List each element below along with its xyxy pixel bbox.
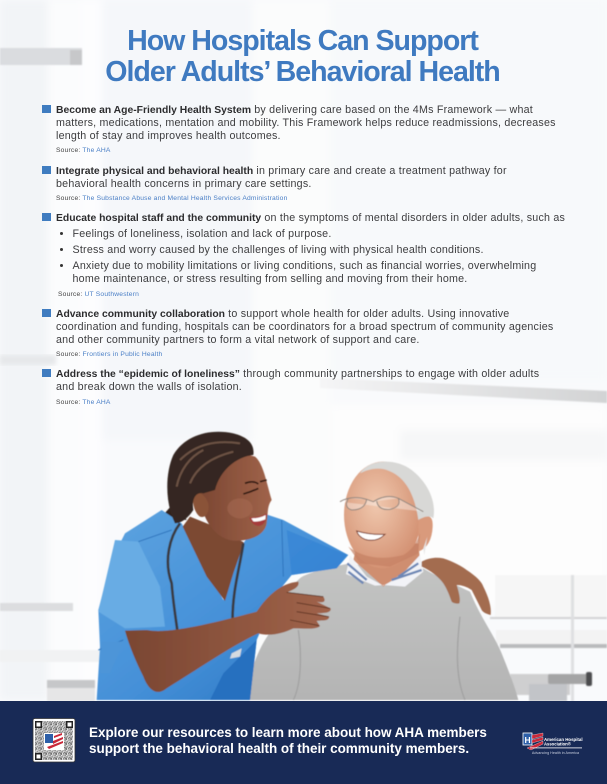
shirt collar: [346, 555, 423, 587]
nurse forearm and hand on shoulder: [125, 582, 331, 692]
item: educate hospital staff and community: Stress and worry caused by the challenges of living with physical health conditions.: [72, 244, 484, 256]
item: address the epidemic of loneliness: Address the “epidemic of loneliness” through community partnerships to engage with older adults: [56, 368, 539, 380]
item: integrate physical and behavioral health: behavioral health concerns in primary care settings.: [56, 178, 312, 190]
nurse neck: [183, 517, 244, 601]
QR code: [33, 718, 75, 762]
AHA logo: American Hospital: [544, 737, 583, 742]
item: address the epidemic of loneliness: Source: The AHA: [56, 398, 111, 406]
item: educate hospital staff and community: Anxiety due to mobility limitations or living conditions, such as financial worries, overwhelming: [72, 260, 536, 272]
item: advance community collaboration: and other community partners to form a vital network of support and care.: [56, 334, 420, 346]
older man hair: [360, 462, 434, 520]
item: educate hospital staff and community: Source: UT Southwestern: [58, 290, 139, 298]
item: age-friendly health system: Source: The AHA: [56, 146, 111, 154]
title: How Hospitals Can Support: [127, 25, 478, 57]
footer call to action: support the behavioral health of their community members.: [89, 741, 469, 756]
item: age-friendly health system: matters, medications, mentation and mobility. This Framework helps reduce readmissions, decreases: [56, 117, 556, 129]
nurse hand on far shoulder: [422, 558, 491, 615]
AHA logo: Advancing Health in America: [532, 751, 580, 755]
smile: [357, 531, 385, 540]
glasses: [340, 496, 423, 512]
photo: nurse and older patient: [97, 432, 518, 700]
nurse face: [198, 455, 272, 541]
title: Older Adults’ Behavioral Health: [105, 56, 500, 88]
nurse smile: [249, 513, 267, 526]
nurse hair back: [162, 502, 187, 520]
item: advance community collaboration: coordination and funding, hospitals can be coordinators for a broad spectrum of community agencies: [56, 321, 553, 333]
footer call to action: Explore our resources to learn more about how AHA members: [89, 725, 487, 740]
item: educate hospital staff and community: Educate hospital staff and the community on the symptoms of mental disorders in older adults, such as: [56, 212, 565, 224]
item: age-friendly health system: Become an Age-Friendly Health System by delivering care based on the 4Ms Framework — what: [56, 104, 533, 116]
stethoscope: [168, 523, 243, 647]
older man neck and face: [353, 543, 420, 587]
item: address the epidemic of loneliness: and break down the walls of isolation.: [56, 381, 242, 393]
item: advance community collaboration: [42, 308, 553, 358]
AHA logo: H: [524, 735, 531, 745]
item: educate hospital staff and community: Feelings of loneliness, isolation and lack of purpose.: [72, 228, 332, 240]
item: advance community collaboration: Source: Frontiers in Public Health: [56, 350, 162, 358]
item: age-friendly health system: length of stay and improves health outcomes.: [56, 130, 281, 142]
item: integrate physical and behavioral health: Source: The Substance Abuse and Mental Health Services Administration: [56, 194, 288, 202]
item: age-friendly health system: [42, 104, 556, 154]
item: address the epidemic of loneliness: [42, 368, 539, 406]
nurse eyes: [243, 480, 267, 494]
AHA logo: Association®: [544, 742, 572, 747]
older man sweater: [243, 564, 518, 700]
title: [105, 25, 500, 88]
footer call to action: [89, 725, 487, 756]
item: advance community collaboration: Advance community collaboration to support whole health for older adults. Using innovative: [56, 308, 509, 320]
AHA logo: [523, 733, 583, 755]
nurse scrub body: [97, 510, 348, 700]
item: educate hospital staff and community: [42, 212, 565, 298]
item: integrate physical and behavioral health: Integrate physical and behavioral health in primary care and create a treatment pathway for: [56, 165, 507, 177]
item: integrate physical and behavioral health: [42, 165, 507, 202]
nurse hair: [167, 432, 254, 523]
item: educate hospital staff and community: home maintenance, or stress resulting from selling and moving from their home.: [72, 273, 467, 285]
ledge and rail details: [0, 575, 607, 701]
footer background: [0, 701, 607, 784]
